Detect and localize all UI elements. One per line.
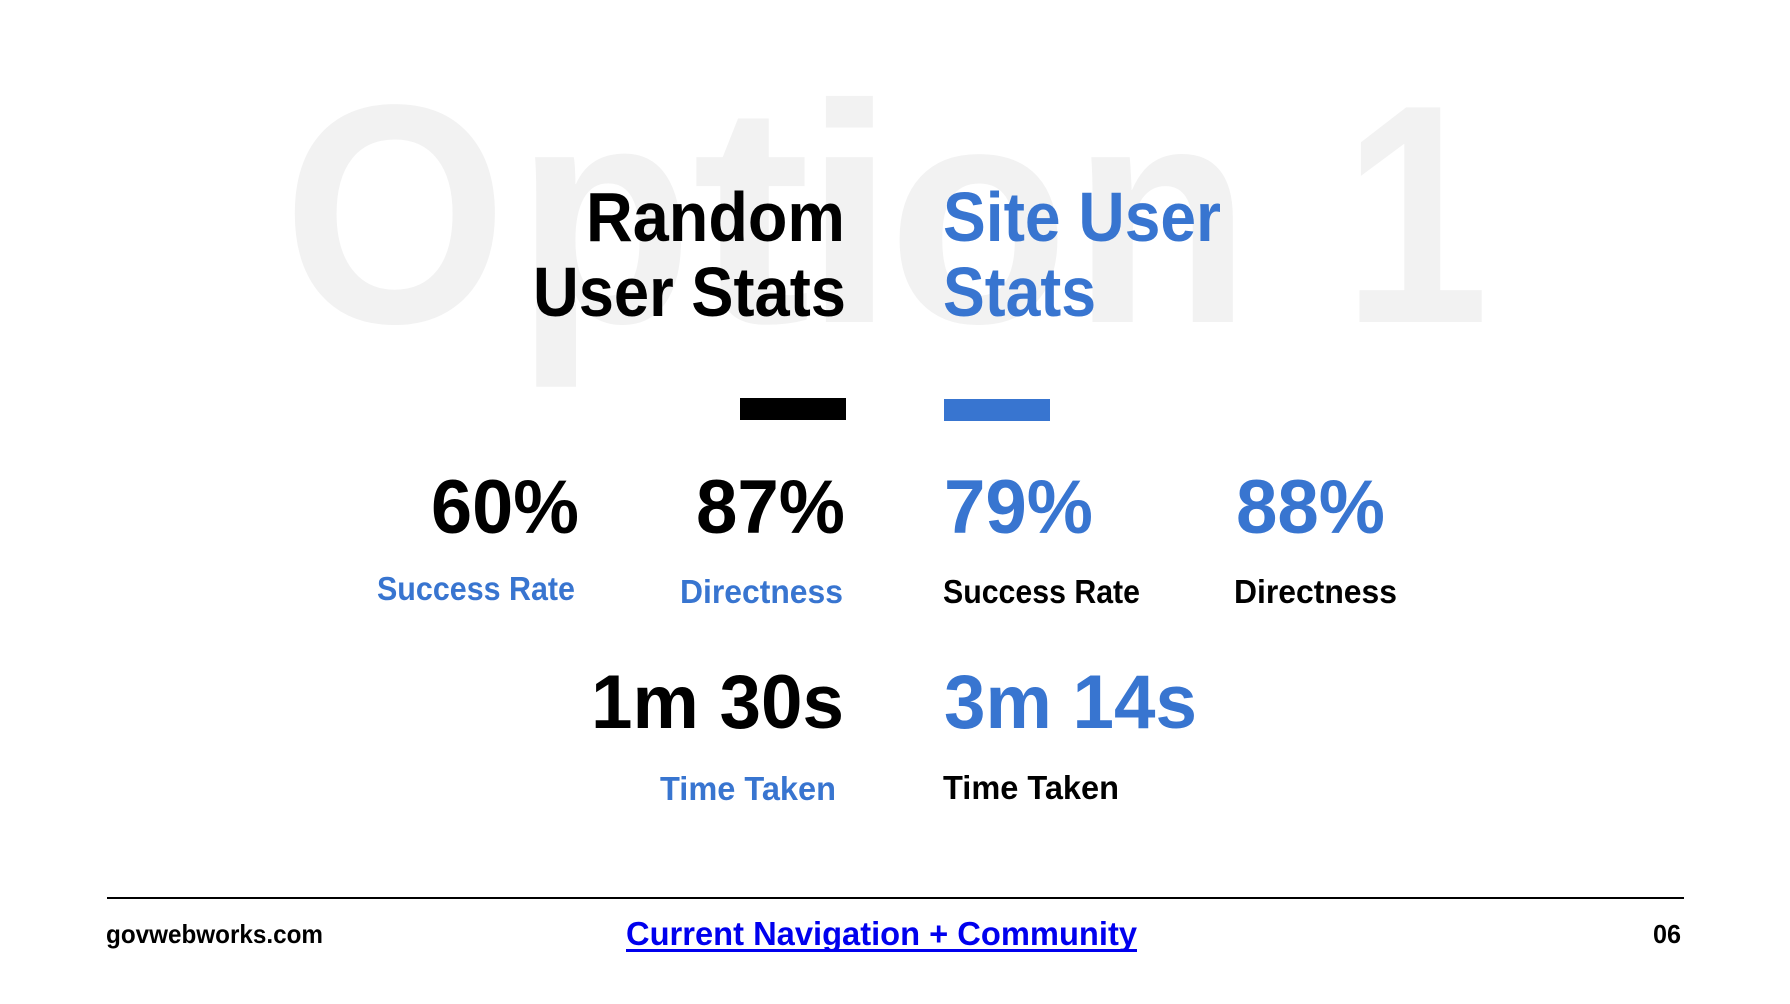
heading: Random User Stats: Random <box>586 178 845 256</box>
watermark: Option 1: O <box>283 41 507 389</box>
footer: page number: 06 <box>1653 919 1681 949</box>
stat: site directness: Directness <box>1234 573 1397 610</box>
stat: site time taken <box>943 660 1197 806</box>
stat: random time taken: Time Taken <box>660 770 836 807</box>
stat: random success rate: Success Rate <box>377 570 575 607</box>
stat: random directness <box>680 465 845 610</box>
black accent bar <box>740 398 846 420</box>
stat: site success rate <box>943 465 1140 610</box>
blue accent bar <box>944 399 1050 421</box>
stat: random directness: Directness <box>680 573 843 610</box>
stat: random time taken <box>591 660 844 807</box>
stat: site directness: 88% <box>1236 465 1385 550</box>
heading: Site User Stats: Stats <box>943 253 1096 331</box>
footer: section link: Current Navigation + Community <box>626 915 1138 952</box>
watermark: Option 1: t <box>692 41 811 389</box>
heading: Site User Stats: Site User <box>943 178 1221 256</box>
watermark: Option 1 <box>283 41 1489 390</box>
watermark: Option 1: p <box>516 41 693 390</box>
stat: site directness <box>1234 465 1397 610</box>
watermark: Option 1: i <box>802 41 897 389</box>
watermark: Option 1: 1 <box>1343 41 1489 389</box>
stat: site time taken: Time Taken <box>943 769 1119 806</box>
stat: random success rate <box>377 465 579 607</box>
heading: Random User Stats: User Stats <box>533 253 846 331</box>
watermark: Option 1: n <box>1072 41 1251 389</box>
stat: random directness: 87% <box>696 465 845 550</box>
stat: site time taken: 3m 14s <box>944 660 1197 745</box>
stat: random success rate: 60% <box>431 465 579 550</box>
stat: site success rate: Success Rate <box>943 573 1140 610</box>
heading: Site User Stats <box>943 178 1221 331</box>
stat: random time taken: 1m 30s <box>591 660 844 745</box>
heading: Random User Stats <box>533 178 846 331</box>
watermark: Option 1: o <box>888 41 1069 389</box>
footer: site name: govwebworks.com <box>106 919 323 949</box>
stat: site success rate: 79% <box>944 465 1093 550</box>
